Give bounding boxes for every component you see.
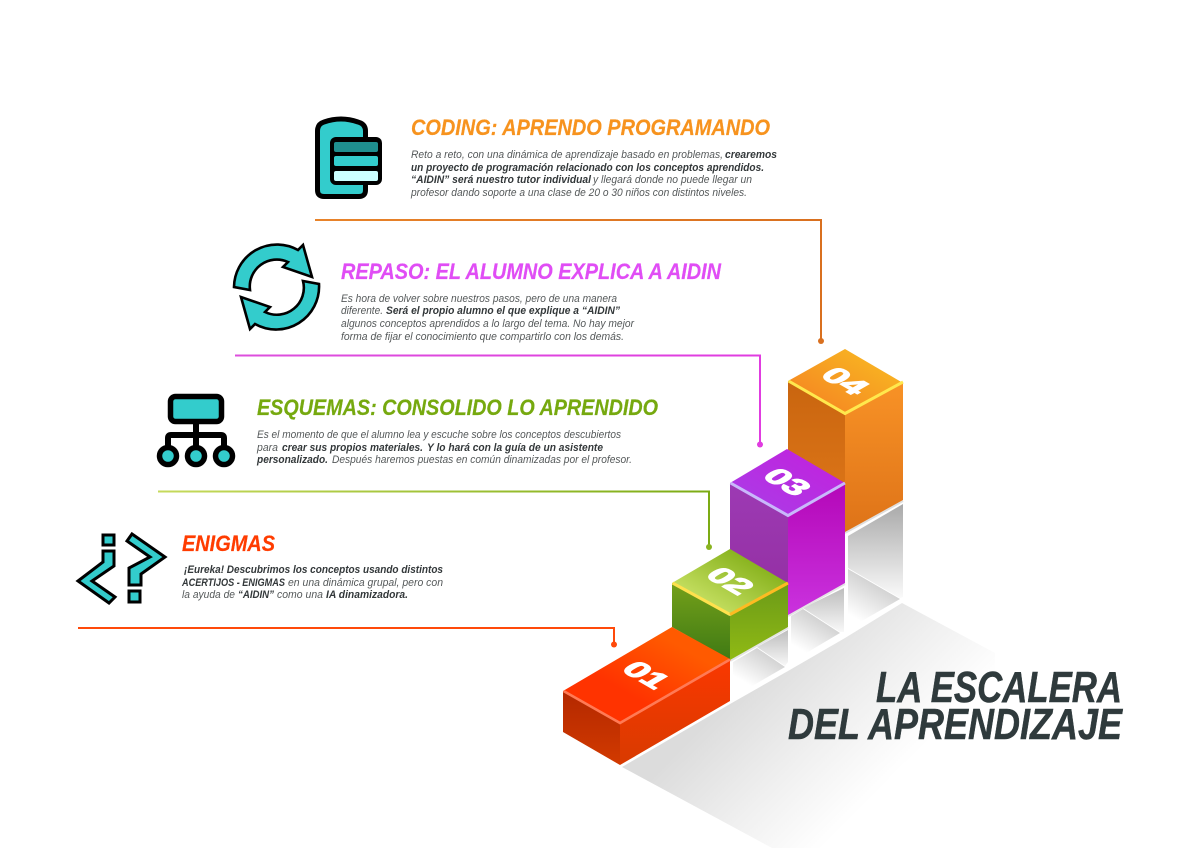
text: esquemas description: Es el momento de que el alumno lea y escuche sobre los conceptos descubiertos [257,429,622,441]
main title: DEL APRENDIZAJE [788,700,1123,749]
text: repaso description: diferente. [341,305,383,317]
step 01 block [563,627,730,765]
text: coding description: y llegará donde no puede llegar un [592,174,752,186]
number 02: 02 [698,563,761,600]
main title [788,663,1123,749]
text: esquemas description [256,429,632,466]
text: enigmas description: “AIDIN” [238,589,275,601]
text: coding description: Reto a reto, con una dinámica de aprendizaje basado en problemas, [411,149,723,161]
text: enigmas description: IA dinamizadora. [326,589,408,601]
text: repaso description [341,293,634,343]
number 04: 04 [813,363,877,400]
text: esquemas description: crear sus propios materiales. [282,442,423,454]
floor shadow [622,603,995,848]
stair shelves [730,501,903,697]
text: repaso description: Es hora de volver sobre nuestros pasos, pero de una manera [341,293,617,305]
icon: riddle symbols [78,534,165,603]
panel: repaso [341,259,722,343]
text: coding description: profesor dando soporte a una clase de 20 o 30 niños con distintos niveles. [410,187,747,199]
text: enigmas description: en una dinámica grupal, pero con [288,577,443,589]
text: coding description: crearemos [725,149,777,161]
heading: repaso: REPASO: EL ALUMNO EXPLICA A AIDIN [341,259,722,284]
panel: esquemas [256,395,658,466]
heading: coding: CODING: APRENDO PROGRAMANDO [411,115,770,140]
icon: code document [318,119,382,196]
text: coding description [410,149,777,199]
text: repaso description: forma de fijar el conocimiento que compartirlo con los demás. [341,331,624,343]
text: esquemas description: personalizado. [256,454,328,466]
text: repaso description: algunos conceptos aprendidos a lo largo del tema. No hay mejor [341,318,634,330]
panel: coding [410,115,777,199]
text: enigmas description: la ayuda de [182,589,235,601]
step 04 block [788,349,903,560]
text: esquemas description: para [256,442,278,454]
connector: esquemas to step 02 [158,492,712,550]
icon: hierarchy diagram [160,396,232,464]
icon: review cycle arrows [234,245,319,330]
text: esquemas description: Después haremos puestas en común dinamizadas por el profesor. [332,454,632,466]
connector: repaso to step 03 [235,356,763,448]
connector: coding to step 04 [315,220,824,344]
text: coding description: un proyecto de programación relacionado con los conceptos aprendidos. [411,162,764,174]
step 03 block [730,449,845,615]
panel: enigmas [181,531,443,601]
text: repaso description: Será el propio alumno el que explique a “AIDIN” [386,305,621,317]
heading: enigmas: ENIGMAS [182,531,275,556]
step 02 block [672,549,788,660]
text: enigmas description [181,564,443,601]
main title: LA ESCALERA [876,663,1122,712]
heading: esquemas: ESQUEMAS: CONSOLIDO LO APRENDIDO [257,395,658,420]
number 01: 01 [614,657,677,694]
connector: enigmas to step 01 [78,628,617,648]
text: enigmas description: ¡Eureka! Descubrimos los conceptos usando distintos [184,564,443,576]
text: enigmas description: ACERTIJOS - ENIGMAS [181,577,285,589]
text: coding description: “AIDIN” será nuestro tutor individual [411,174,592,186]
text: esquemas description: Y lo hará con la guía de un asistente [427,442,603,454]
number 03: 03 [755,464,818,501]
text: enigmas description: como una [277,589,323,601]
